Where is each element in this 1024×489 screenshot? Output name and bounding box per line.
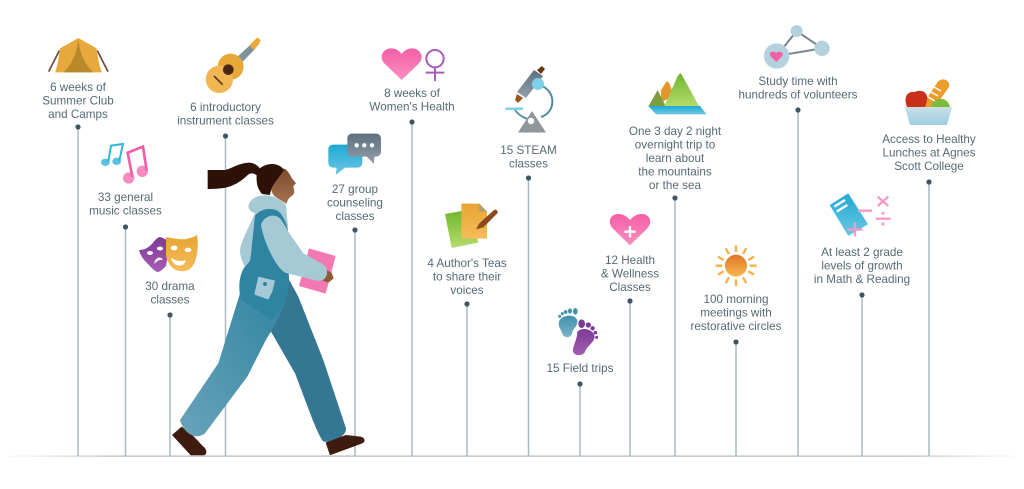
ground line xyxy=(0,456,1024,457)
text: summer club: 6 weeks of xyxy=(50,81,107,94)
text: morning meetings: meetings with xyxy=(700,306,772,320)
text: math reading: in Math & Reading xyxy=(814,273,910,286)
icon: heart with plus xyxy=(610,214,650,245)
text: drama: 30 drama xyxy=(145,280,195,293)
text: math reading: levels of growth xyxy=(821,260,903,272)
front shoe xyxy=(172,427,206,455)
sleeve xyxy=(261,216,327,281)
text: overnight trip: the mountains xyxy=(638,166,712,178)
back leg xyxy=(260,278,346,442)
pocket xyxy=(254,277,275,300)
icon: music notes xyxy=(101,144,148,184)
text: morning meetings: 100 morning xyxy=(704,293,768,306)
text: math reading: At least 2 grade xyxy=(821,246,903,259)
text: health wellness: Classes xyxy=(609,281,651,294)
text: summer club: and Camps xyxy=(48,108,108,121)
text: field trips: 15 Field trips xyxy=(547,362,614,375)
text: overnight trip: learn about xyxy=(646,152,705,165)
text: womens health: 8 weeks of xyxy=(384,87,441,100)
text: health wellness: & Wellness xyxy=(601,268,659,280)
text: authors teas: to share their xyxy=(433,270,501,284)
text: steam: classes xyxy=(509,158,548,170)
text: study time: Study time with xyxy=(758,75,838,88)
text: instrument: instrument classes xyxy=(177,114,274,128)
text: authors teas: voices xyxy=(450,284,484,297)
text: study time: hundreds of volunteers xyxy=(739,88,858,102)
text: music: 33 general xyxy=(98,191,153,204)
overalls bib xyxy=(239,209,289,320)
text: counseling: counseling xyxy=(327,196,383,210)
text: overnight trip: overnight trip to xyxy=(635,138,716,152)
icon: math book xyxy=(830,193,891,236)
icon: footprints xyxy=(558,308,598,355)
timeline stems and dots xyxy=(75,107,932,456)
front leg xyxy=(180,290,288,436)
icon: sun xyxy=(716,245,757,286)
back shoe xyxy=(326,435,365,455)
text: healthy lunches: Access to Healthy xyxy=(882,133,976,146)
text: morning meetings: restorative circles xyxy=(691,320,782,333)
text: healthy lunches: Lunches at Agnes xyxy=(883,146,976,160)
hood and back of sweatshirt xyxy=(240,195,288,267)
text: womens health: Women's Health xyxy=(369,100,455,114)
text: healthy lunches: Scott College xyxy=(894,160,964,173)
icon: guitar xyxy=(206,37,261,93)
text: summer club: Summer Club xyxy=(42,94,114,108)
hair xyxy=(208,163,284,195)
text: drama: classes xyxy=(151,294,190,306)
icon: volunteer network xyxy=(764,25,830,69)
icon: notes and pencil xyxy=(445,204,498,248)
icon: microscope xyxy=(506,66,552,132)
text: counseling: 27 group xyxy=(332,183,379,196)
icon: heart and female symbol xyxy=(382,48,444,81)
text: authors teas: 4 Author's Teas xyxy=(427,257,507,270)
icon: lunch bowl xyxy=(905,79,952,125)
figure: walking student xyxy=(172,163,365,455)
text: overnight trip: or the sea xyxy=(649,179,701,192)
book xyxy=(299,248,336,294)
icon: chat bubbles xyxy=(328,134,381,175)
text: overnight trip: One 3 day 2 night xyxy=(629,125,722,138)
text: instrument: 6 introductory xyxy=(190,101,261,114)
icon: mountains xyxy=(648,73,707,114)
head xyxy=(271,168,296,204)
hand xyxy=(323,269,334,283)
text: music: music classes xyxy=(89,204,162,218)
text: counseling: classes xyxy=(336,210,375,223)
text: steam: 15 STEAM xyxy=(500,144,557,157)
text: health wellness: 12 Health xyxy=(605,254,655,267)
icon: tent xyxy=(49,38,108,72)
icon: drama masks xyxy=(139,235,198,272)
